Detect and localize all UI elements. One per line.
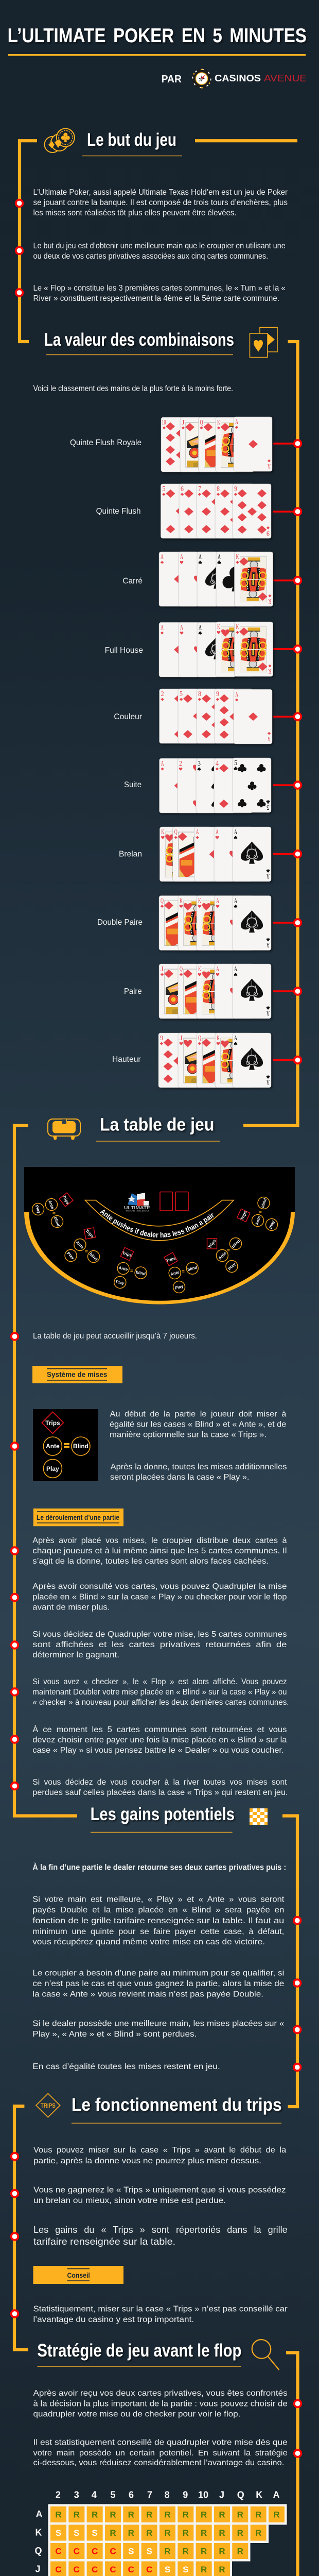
icon: chip stack [250, 1808, 268, 1825]
text block [33, 2185, 286, 2205]
text block: maintenant Doubler votre mise placée en « Blind » sur la case « Play » ou [32, 1688, 287, 1697]
cards: K [217, 419, 220, 427]
betting seat 6: Ante [254, 1215, 262, 1226]
text block: À ce moment les 5 cartes communes sont retournées et vous [32, 1724, 287, 1734]
betting seat 2 [62, 1227, 102, 1265]
dealer arc [84, 1199, 235, 1241]
icon: magnifying glass [248, 2336, 279, 2370]
text block [33, 284, 286, 303]
hand: double paire [97, 895, 271, 950]
text block: Play », « Ante » et « Blind » sont perdues. [32, 2030, 197, 2039]
text block: partie, après la donne vous ne pourrez plus miser dessus. [33, 2157, 261, 2165]
text block [32, 1630, 287, 1659]
hand: quinte flush royale [70, 417, 272, 472]
cards: 5 [267, 803, 270, 811]
heading: Les gains potentiels [91, 1804, 235, 1824]
poker table diagram [24, 1167, 295, 1304]
cards: 4 [216, 760, 219, 768]
row headers: A [36, 2509, 42, 2519]
heading: Stratégie de jeu avant le flop [37, 2341, 241, 2361]
text block [110, 1463, 287, 1482]
betting seat 6: blind [260, 1198, 268, 1209]
text block [33, 2389, 288, 2418]
text block: En cas d’égalité toutes les mises restent en jeu. [32, 2062, 220, 2071]
betting seat 3: Play [115, 1279, 125, 1286]
cards: J [161, 965, 164, 973]
icon: trips diamond [36, 2094, 60, 2117]
text block: l’avantage du casino y est trop important. [33, 2315, 194, 2324]
text block: ce n’est pas le cas et que vous gagnez la partie, alors la mise de [32, 1979, 284, 1988]
subheading: le déroulement d'une partie [33, 1509, 123, 1526]
cards [159, 552, 273, 606]
cards: 10 [162, 419, 166, 427]
betting seat 2: Trips [84, 1228, 95, 1239]
text block: L’Ultimate Poker, aussi appelé Ultimate Texas Hold’em est un jeu de Poker [33, 188, 288, 197]
logo: ultimate texas hold'em: ULTIMATE [124, 1206, 151, 1210]
text block: fonction de le grille tarifaire renseignée sur la table. Il faut au [32, 1917, 284, 1925]
cards: K [217, 1035, 220, 1042]
cards: A [196, 828, 199, 836]
icon: playing cards [250, 328, 277, 358]
panel: la valeur des combinaisons [33, 328, 301, 1088]
betting seat 5: Trips [207, 1238, 217, 1249]
cards: A [180, 553, 184, 561]
text block [32, 1677, 289, 1707]
text block: case « Play » si vous pensez battre le « Dealer » ou vous coucher. [32, 1746, 284, 1755]
text block [32, 1724, 287, 1755]
cards: A [218, 553, 221, 561]
text block: devez choisir entre payer une fois la mise placée en « Blind » sur la [32, 1736, 287, 1744]
chart: pre-flop strategy grid: J [219, 2489, 224, 2500]
text block: déterminer le gagnant. [32, 1651, 119, 1659]
hand: full house: Full House [105, 646, 143, 655]
betting seat 4 [164, 1252, 200, 1294]
text block: égalité sur les cases « Blind » et « Ante », et de [110, 1420, 286, 1429]
community card boxes [160, 1192, 188, 1211]
text block: Après la donne, toutes les mises additionnelles [111, 1463, 287, 1471]
cards: 9 [267, 529, 270, 537]
betting seat 1: = [52, 1211, 56, 1216]
cards: A [235, 691, 239, 699]
betting seat 3: blind [135, 1270, 146, 1276]
cards: A [267, 735, 271, 742]
cards: A [161, 553, 164, 561]
cell letters: RRRRRRRRRRRRR [55, 2510, 280, 2519]
cards: K [269, 597, 272, 605]
hand: quinte flush: Quinte Flush [96, 507, 141, 516]
cards: J [182, 419, 185, 427]
text block [33, 242, 286, 261]
heading: La valeur des combinaisons [44, 330, 234, 350]
text block: À la fin d’une partie le dealer retourne ses deux cartes privatives puis : [32, 1863, 286, 1872]
text block [32, 1969, 284, 1999]
cards: Q [180, 965, 183, 973]
text block: se jouant contre la banque. Il est composé de trois tours d’enchères, plus [33, 198, 288, 207]
cards: 8 [217, 485, 220, 493]
cards: A [161, 624, 164, 632]
cell letters [55, 2510, 280, 2576]
betting seat 4: blind [187, 1265, 198, 1272]
text block: payés Double et la mise placée en « Blind » sera payée en [32, 1906, 284, 1914]
cards: A [216, 828, 219, 836]
grid background [48, 2504, 287, 2576]
chart: pre-flop strategy grid: A [273, 2489, 280, 2500]
cards: K [236, 623, 239, 631]
betting seat 3: Trips [121, 1250, 133, 1258]
icon: casino chip compass logo [192, 69, 211, 89]
text block: s’agit de la donne, toutes les cartes sont alors faces cachées. [32, 1557, 269, 1566]
hand: paire [124, 964, 271, 1019]
cards: A [266, 1009, 270, 1017]
subheading: conseil: Conseil [67, 2271, 90, 2279]
cards: A [266, 1078, 270, 1086]
connectors [273, 440, 301, 1063]
heading: Le but du jeu [87, 130, 176, 150]
cards: A [199, 553, 202, 561]
text block: Il est statistiquement conseillé de quadrupler votre mise dès que [33, 2438, 288, 2447]
panel: les gains potentiels [32, 1804, 301, 2071]
hand: couleur: Couleur [114, 713, 143, 721]
cards: A [234, 828, 238, 836]
chart: pre-flop strategy grid: 10 [198, 2489, 208, 2500]
cards: Q [200, 419, 203, 427]
text block: Si votre main est meilleure, « Play » et « Ante » vous seront [32, 1895, 285, 1904]
panel: betting spots illustration [33, 1409, 98, 1481]
cards: 3 [198, 760, 201, 768]
betting seat 6 [237, 1196, 279, 1232]
icon: poker chips [44, 129, 75, 152]
text block: Si vous décidez de Quadrupler votre mise, les 5 cartes communes [32, 1630, 287, 1639]
text block: ou deux de vos cartes privatives associées aux cinq cartes communes. [33, 252, 268, 261]
cards: A [234, 965, 238, 973]
cards [160, 689, 272, 744]
text block: vous récupérez quand même votre mise en cas de victoire. [32, 1938, 265, 1946]
cards [159, 895, 271, 950]
cards: K [198, 897, 201, 905]
logo: ultimate texas hold'em [124, 1193, 151, 1212]
cards: 5 [180, 690, 183, 698]
cards: 8 [198, 690, 201, 698]
row headers: J [35, 2564, 41, 2574]
cards: K [161, 828, 164, 836]
cards: A [267, 462, 271, 470]
chart: pre-flop strategy grid [32, 2489, 287, 2576]
cards: A [234, 1035, 238, 1042]
text block: « checker » à nouveau pour afficher les deux dernières cartes communes. [32, 1698, 289, 1707]
betting seat 5: blind [231, 1239, 241, 1249]
cards [161, 417, 272, 472]
text block: quadrupler votre mise ou de checker pour voir le flop. [33, 2410, 240, 2418]
text block [110, 1410, 286, 1439]
subheading: système de mises [32, 1366, 122, 1383]
cell letters: CCCC [55, 2546, 116, 2556]
text block: Si vous avez « checker », le « Flop » est alors affiché. Vous pouvez [32, 1677, 287, 1686]
hand: paire: Paire [124, 987, 142, 996]
cell letters: SSS [56, 2528, 98, 2538]
text block: Statistiquement, miser sur la case « Trips » n’est pas conseillé car [33, 2305, 288, 2314]
text block: la case « Ante » vous revient mais n’est pas payée Double. [32, 1990, 263, 1999]
panel: betting spots illustration: Play [46, 1465, 59, 1472]
text block: avant de miser plus. [32, 1603, 110, 1612]
cards: A [266, 941, 270, 949]
betting seat 3: = [130, 1268, 133, 1274]
hand: carré: Carré [122, 577, 143, 586]
hand: full house [105, 622, 273, 677]
panel: la table de jeu [10, 1114, 295, 1797]
hand: carré [122, 552, 273, 606]
betting seat 2: = [85, 1249, 88, 1255]
text block: Si le dealer possède une meilleure main, les mises placées sur « [32, 2019, 284, 2028]
text block: Le « Flop » constitue les 3 premières cartes communes, le « Turn » et la « [33, 284, 286, 293]
byline with Casinos Avenue logo: AVENUE [264, 73, 307, 83]
betting seat 1: blind [53, 1216, 61, 1227]
cards: 5 [162, 485, 165, 493]
cards: A [216, 897, 220, 905]
text block: Les gains du « Trips » sont répertoriés dans la grille [33, 2225, 288, 2235]
text block: les mises sont réalisées tôt plus elles peuvent être élevées. [33, 209, 237, 217]
cards: A [199, 624, 202, 632]
byline with Casinos Avenue logo: CASINOS [215, 73, 261, 83]
icon: poker table [48, 1119, 80, 1140]
dealer arc: Ante pushes if dealer has less than a pair [100, 1210, 214, 1238]
cards: K [269, 667, 272, 675]
hand: suite: Suite [124, 781, 141, 789]
text block [32, 1536, 287, 1566]
betting seat 5: Ante [218, 1250, 227, 1261]
chart: pre-flop strategy grid: K [256, 2489, 262, 2500]
text block: Le but du jeu est d’obtenir une meilleure main que le croupier en utilisant une [33, 242, 286, 250]
panel: stratégie de jeu avant le flop [32, 2336, 301, 2576]
text block [33, 2305, 288, 2324]
text block: manière optionnelle sur la case « Trips ». [110, 1431, 267, 1439]
betting seat 1: Ante [47, 1199, 55, 1210]
text block: River » constituent respectivement la 4ème et la 5ème carte commune. [33, 294, 279, 303]
row headers: K [35, 2528, 42, 2538]
betting seat 6: Trips [240, 1210, 248, 1221]
hand: suite [124, 758, 271, 813]
panel: le but du jeu [16, 129, 288, 303]
betting seat 6: = [259, 1210, 262, 1215]
column headers: 23456789 [56, 2489, 188, 2500]
cards: 9 [216, 690, 219, 698]
text block [33, 188, 288, 217]
cards: 2 [179, 760, 182, 768]
heading: Le fonctionnement du trips [72, 2095, 282, 2115]
subheading: le déroulement d'une partie: Le déroulement d’une partie [37, 1513, 119, 1521]
betting seat 4: Trips [166, 1256, 176, 1263]
text block: chaque joueurs et à lui même ainsi que les 5 cartes communes. Il [32, 1547, 287, 1555]
subheading: conseil [33, 2266, 123, 2284]
cards [161, 484, 271, 538]
cards: K [198, 965, 201, 973]
text block [32, 1895, 285, 1946]
betting seat 4: Ante [170, 1270, 180, 1277]
row headers [32, 2509, 43, 2576]
betting seat 4: = [182, 1269, 185, 1275]
text block: votre main possède un certain potentiel. En suivant la stratégie [33, 2449, 288, 2458]
hand: hauteur [112, 1033, 271, 1088]
row headers: Q [34, 2546, 42, 2556]
betting seat 2: Play [66, 1251, 76, 1261]
cards: A [266, 872, 270, 880]
cards [159, 622, 273, 677]
text block [32, 1582, 287, 1612]
cards: J [180, 1035, 183, 1042]
cards: 2 [161, 690, 164, 698]
cards: A [216, 965, 220, 973]
text block: Si vous décidez de vous coucher à la river toutes vos mises sont [32, 1778, 287, 1787]
hand: couleur [114, 689, 272, 744]
icon: trips diamond: TRIPS [41, 2102, 56, 2109]
cards [158, 1033, 271, 1088]
text block: Après avoir placé vos mises, le croupier distribue deux cartes à [32, 1536, 287, 1545]
text block: placée en « Blind » sur la case « Play » ou checker pour voir le flop [32, 1593, 287, 1602]
text block [32, 2019, 284, 2039]
betting seat 1: Trips [62, 1194, 70, 1206]
text block [33, 2438, 288, 2467]
text block: Le croupier a besoin d’une paire au minimum pour se qualifier, si [32, 1969, 284, 1977]
betting seat 3: Ante [118, 1265, 129, 1272]
cell letters: RR [201, 2565, 225, 2574]
cards: Q [174, 828, 178, 836]
panel: betting spots illustration: Trips [45, 1419, 60, 1427]
cards: 9 [234, 485, 237, 493]
cards: A [180, 624, 184, 632]
text block: Vous pouvez miser sur la case « Trips » avant le début de la [33, 2146, 286, 2155]
chart: pre-flop strategy grid: Q [237, 2489, 244, 2500]
betting seat 5: = [227, 1248, 230, 1253]
hand: hauteur: Hauteur [112, 1055, 141, 1064]
betting seat 1 [30, 1192, 74, 1229]
byline with Casinos Avenue logo: PAR [162, 74, 182, 85]
cards [159, 964, 271, 1019]
byline with Casinos Avenue logo [162, 69, 307, 89]
hand: brelan [119, 827, 271, 882]
grid cells [50, 2514, 285, 2576]
text block: Au début de la partie le joueur doit miser à [110, 1410, 286, 1418]
hand: quinte flush royale: Quinte Flush Royale [70, 438, 141, 447]
cards: Q [161, 897, 164, 905]
cards: Q [198, 1035, 201, 1042]
cell letters: CCCCCC [55, 2565, 152, 2574]
text block: Après avoir consulté vos cartes, vous pouvez Quadrupler la mise [32, 1582, 287, 1591]
cards: A [161, 760, 164, 768]
text block [33, 2146, 286, 2165]
cards: K [236, 553, 239, 561]
cards: A [235, 418, 239, 426]
betting seat 1: Play [34, 1205, 42, 1214]
betting seat 4: Play [174, 1284, 184, 1291]
cell letters: RRRRR [164, 2546, 243, 2556]
cards: K [180, 897, 183, 905]
panel: betting spots illustration: Ante [46, 1443, 60, 1450]
betting seat 2: Ante [75, 1240, 85, 1250]
text block: tarifaire renseignée sur la table. [33, 2236, 175, 2247]
cell letters: SS [165, 2565, 188, 2574]
cards: 9 [160, 1035, 163, 1042]
text block: seront placées dans la case « Play ». [110, 1473, 249, 1482]
cards [160, 758, 271, 813]
text block: Après avoir reçu vos deux cartes privatives, vous êtes confrontés [33, 2389, 288, 2398]
text block: à la décision la plus important de la partie : vous pouvez choisir de [33, 2400, 288, 2409]
cards [160, 827, 271, 882]
betting seat 6: Play [269, 1219, 275, 1229]
panel: betting spots illustration: Blind [73, 1443, 88, 1450]
hand: double paire: Double Paire [97, 918, 143, 927]
text block [33, 2225, 288, 2247]
logo: ultimate texas hold'em: TEXAS HOLD'EM [126, 1210, 149, 1212]
cards: A [234, 897, 238, 905]
text block: Voici le classement des mains de la plus forte à la moins forte. [33, 384, 233, 393]
text block [32, 1778, 288, 1797]
cards: 7 [198, 485, 201, 493]
heading: La table de jeu [100, 1114, 214, 1134]
subheading: système de mises: Système de mises [47, 1370, 108, 1379]
text block: La table de jeu peut accueillir jusqu’à 7 joueurs. [33, 1332, 197, 1341]
text block: Vous ne gagnerez le « Trips » uniquement que si vous possédez [33, 2185, 286, 2195]
text block: ci-dessous, vous réduisez considérablement l’avantage du casino. [33, 2459, 284, 2467]
cell letters: RRRRRRRRR [110, 2528, 261, 2538]
cell letters: SS [128, 2546, 152, 2556]
text block: minimum une quinte pour se faire payer cette case, à défaut, [32, 1927, 284, 1936]
betting seat 5 [207, 1235, 244, 1275]
cards: K [217, 623, 220, 631]
betting seat 5: Play [227, 1262, 237, 1271]
cards: 5 [234, 759, 237, 767]
betting seat 2: blind [88, 1251, 99, 1262]
hand: brelan: Brelan [119, 850, 142, 859]
betting seat 3 [113, 1247, 148, 1290]
panel: le fonctionnement du trips [11, 2094, 288, 2324]
hand: quinte flush [96, 484, 271, 538]
text block: sont affichées et les cartes privatives retournées afin de [32, 1640, 287, 1649]
text block: un brelan ou mieux, sinon votre mise est perdue. [33, 2196, 226, 2205]
cards: 6 [181, 485, 184, 493]
text block: perdues sauf celles placées dans la case « Trips » qui restent en jeu. [32, 1788, 288, 1797]
